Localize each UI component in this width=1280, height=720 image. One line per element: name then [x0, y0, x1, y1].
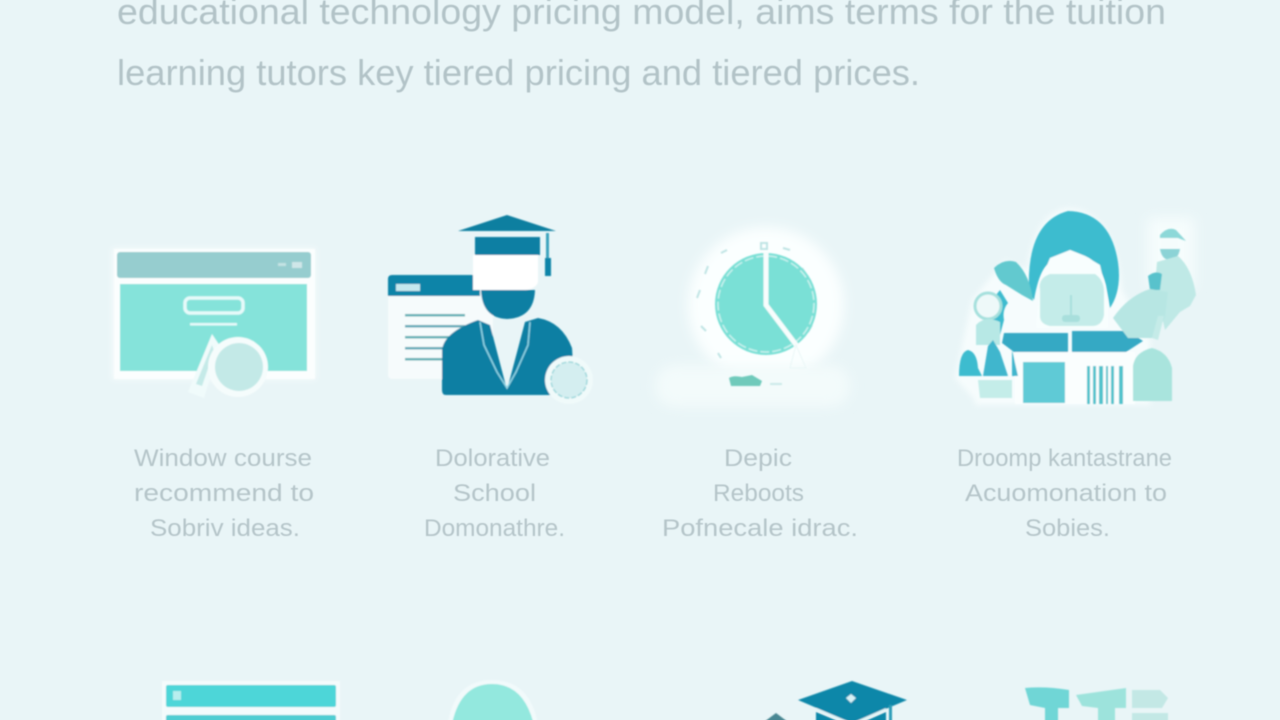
- label: graduate icon caption: Domonathre.: [424, 515, 565, 542]
- label: clock icon caption: Pofnecale idrac.: [662, 515, 858, 542]
- label: family icon caption: Acuomonation to: [965, 480, 1167, 507]
- icon: bottom list panel: [162, 681, 340, 720]
- label: window icon caption: [134, 445, 314, 542]
- label: window icon caption: recommend to: [134, 480, 314, 507]
- label: window icon caption: Window course: [134, 445, 312, 472]
- icon: bottom school blocks: [1025, 687, 1168, 720]
- icon: graduate with document: [388, 215, 593, 404]
- intro text block: [117, 0, 1166, 93]
- label: clock icon caption: Reboots: [713, 480, 804, 507]
- icon: browser window with certificate: [112, 248, 316, 398]
- intro text block: learning tutors key tiered pricing and tiered prices.: [117, 52, 920, 93]
- label: graduate icon caption: School: [453, 480, 536, 507]
- icon: family and school house: [955, 208, 1196, 405]
- label: window icon caption: Sobriv ideas.: [150, 515, 300, 542]
- label: graduate icon caption: Dolorative: [435, 445, 550, 472]
- label: graduate icon caption: [424, 445, 565, 542]
- label: family icon caption: Sobies.: [1025, 515, 1110, 542]
- label: clock icon caption: Depic: [724, 445, 792, 472]
- label: clock icon caption: [662, 445, 858, 542]
- icon: bottom dome: [447, 680, 539, 720]
- icon: clock: [655, 227, 850, 407]
- label: family icon caption: Droomp kantastrane: [957, 445, 1172, 472]
- label: family icon caption: [957, 445, 1172, 542]
- icon: bottom graduation cap: [764, 681, 907, 720]
